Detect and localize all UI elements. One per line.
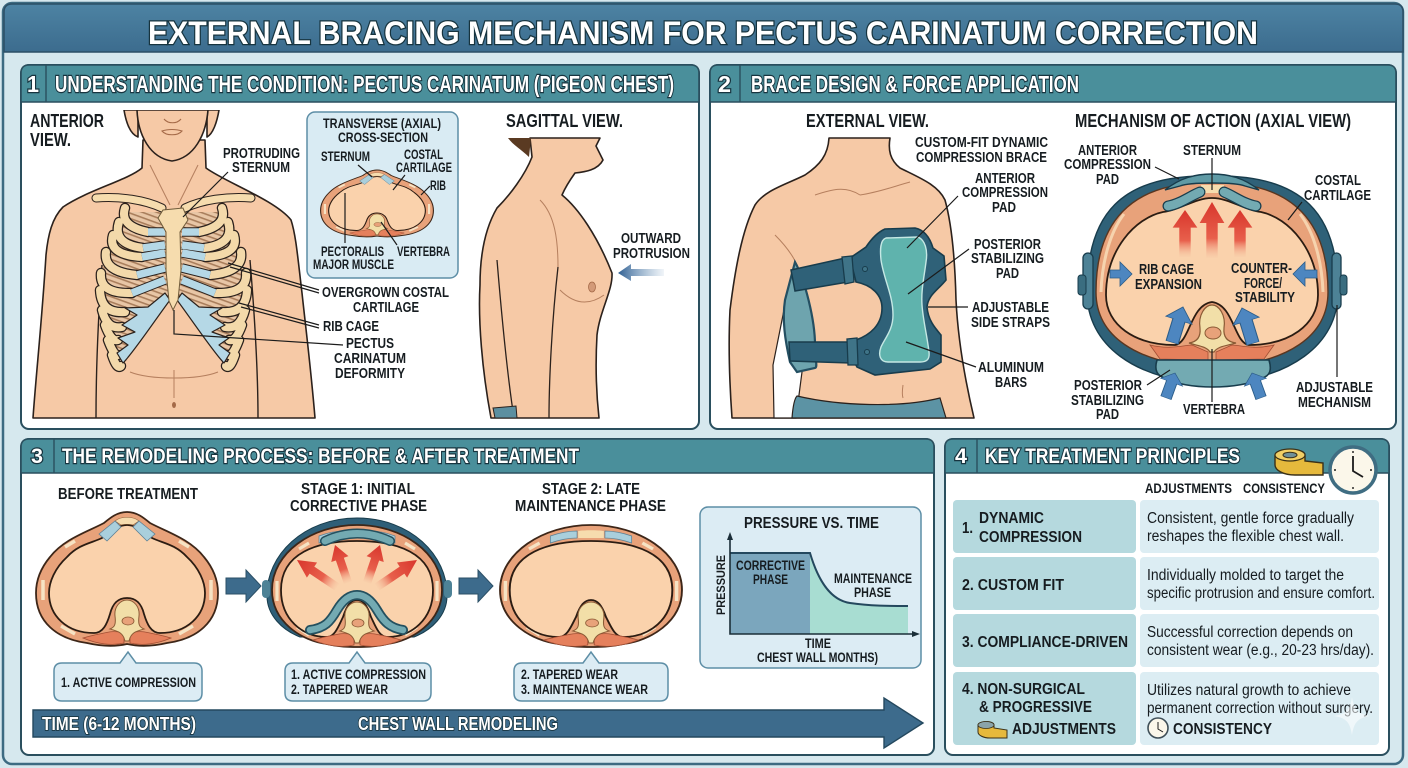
- principle 4: non-surgical and progressive: Utilizes natural growth to achieve: [1147, 682, 1351, 699]
- chart: pressure vs time: PRESSURE: [714, 555, 728, 615]
- label and arrow: outward protrusion: OUTWARD: [621, 231, 681, 247]
- principle 1: dynamic compression: Consistent, gentle force gradually: [1147, 510, 1354, 527]
- inset: transverse cross-section: VERTEBRA: [397, 244, 450, 259]
- label and arrow: outward protrusion: PROTRUSION: [613, 246, 690, 262]
- panel 4 heading: 4: [955, 445, 967, 468]
- chart: pressure vs time: [700, 507, 921, 668]
- stage 1: initial corrective phase: CORRECTIVE PHASE: [290, 498, 427, 515]
- chart: pressure vs time: CORRECTIVE: [736, 558, 805, 573]
- external view labels: POSTERIOR: [974, 237, 1041, 253]
- axial diagram labels: EXPANSION: [1135, 277, 1202, 293]
- label: pectus carinatum deformity: CARINATUM: [334, 351, 406, 367]
- panel 2 heading: BRACE DESIGN & FORCE APPLICATION: [751, 71, 1079, 97]
- axial diagram labels: ANTERIOR: [1078, 143, 1137, 159]
- principle 3: compliance-driven: [953, 614, 1379, 667]
- principle 4: non-surgical and progressive: [953, 672, 1379, 745]
- axial diagram labels: STABILIZING: [1071, 393, 1144, 409]
- thoracic cavity: [1106, 198, 1318, 345]
- label: overgrown costal cartilage: CARTILAGE: [353, 300, 419, 316]
- external view labels: ANTERIOR: [975, 171, 1035, 187]
- mechanism of action heading: MECHANISM OF ACTION (AXIAL VIEW): [1075, 111, 1351, 131]
- axial diagram labels: VERTEBRA: [1183, 402, 1245, 418]
- axial mechanism diagram: [1078, 174, 1347, 402]
- principle 1: dynamic compression: reshapes the flexible chest wall.: [1147, 528, 1344, 545]
- external view heading: EXTERNAL VIEW.: [806, 111, 929, 131]
- principle 3: compliance-driven: Successful correction depends on: [1147, 624, 1353, 641]
- stage: before treatment: [36, 486, 218, 701]
- posterior pad: [1156, 360, 1270, 387]
- stage 1: initial corrective phase: STAGE 1: INITIAL: [301, 481, 415, 498]
- arrow: stage 1 to stage 2: [459, 570, 493, 602]
- brace frame: [849, 228, 946, 375]
- stage: before treatment: BEFORE TREATMENT: [58, 486, 198, 503]
- external view labels: BARS: [995, 375, 1027, 391]
- panel 3 heading: [21, 439, 934, 473]
- brace green pad: [880, 237, 929, 362]
- anterior view heading: VIEW.: [30, 130, 71, 150]
- spine: [1150, 345, 1274, 360]
- panel 2: brace design: [710, 65, 1396, 429]
- arrow: before to stage 1: [226, 570, 261, 602]
- external view labels: SIDE STRAPS: [971, 315, 1050, 331]
- panel 2 heading: [710, 65, 1396, 102]
- axial diagram labels: POSTERIOR: [1074, 378, 1142, 394]
- chart: pressure vs time: TIME: [805, 636, 831, 651]
- stage 2: late maintenance phase: MAINTENANCE PHASE: [515, 498, 666, 515]
- panel 2 heading: 2: [718, 71, 731, 97]
- principle 2: custom fit: Individually molded to target the: [1147, 567, 1344, 584]
- icon: measuring tape: [1275, 449, 1323, 475]
- inset: transverse cross-section: CROSS-SECTION: [338, 130, 428, 145]
- timeline arrow: CHEST WALL REMODELING: [358, 714, 558, 734]
- label: protruding sternum: PROTRUDING: [223, 146, 300, 162]
- panel 1 heading: [21, 65, 699, 102]
- inset: transverse cross-section: RIB: [430, 178, 446, 193]
- external view labels: COMPRESSION BRACE: [916, 150, 1047, 166]
- panel 3 heading: THE REMODELING PROCESS: BEFORE & AFTER TREATMENT: [62, 445, 579, 468]
- principle 1: dynamic compression: 1.: [962, 520, 973, 537]
- panel 1 heading: UNDERSTANDING THE CONDITION: PECTUS CARINATUM (PIGEON CHEST): [55, 71, 674, 97]
- adjustable side mechanisms: [1083, 253, 1093, 309]
- icon: small tape: [978, 722, 1007, 738]
- axial diagram labels: [1064, 143, 1373, 423]
- label: pectus carinatum deformity: DEFORMITY: [335, 366, 405, 382]
- inset: transverse cross-section: CARTILAGE: [396, 160, 452, 175]
- axial diagram labels: STERNUM: [1183, 143, 1241, 159]
- principle 4: non-surgical and progressive: CONSISTENCY: [1173, 721, 1273, 738]
- panel 4 heading: [945, 439, 1389, 473]
- principle 2: custom fit: [953, 557, 1379, 610]
- title bar: [4, 4, 1403, 52]
- axial diagram labels: COSTAL: [1315, 173, 1361, 189]
- label: overgrown costal cartilage: OVERGROWN COSTAL: [322, 285, 449, 301]
- inset: transverse cross-section: PECTORALIS: [321, 244, 384, 259]
- principle 1: dynamic compression: [953, 500, 1379, 553]
- principle 3: compliance-driven: consistent wear (e.g., 20-23 hrs/day).: [1147, 642, 1374, 659]
- title bar: EXTERNAL BRACING MECHANISM FOR PECTUS CARINATUM CORRECTION: [148, 15, 1258, 51]
- axial diagram labels: COMPRESSION: [1064, 157, 1151, 173]
- inset: transverse cross-section: COSTAL: [404, 147, 443, 162]
- axial diagram labels: FORCE/: [1244, 276, 1282, 292]
- sagittal torso figure: [479, 138, 612, 418]
- chart: pressure vs time: PHASE: [854, 585, 891, 600]
- anterior view heading: ANTERIOR: [30, 111, 104, 131]
- brace straps: [789, 258, 850, 363]
- principle 1: dynamic compression: DYNAMIC: [979, 510, 1044, 527]
- icon: clock: [1330, 447, 1376, 493]
- axial diagram labels: PAD: [1096, 407, 1119, 423]
- principle 2: custom fit: specific protrusion and ensure comfort.: [1147, 585, 1375, 602]
- stage 1: initial corrective phase: 1. ACTIVE COMPRESSION: [291, 667, 426, 682]
- external view labels: PAD: [992, 200, 1016, 216]
- chart: pressure vs time: MAINTENANCE: [834, 571, 912, 586]
- external view labels: ADJUSTABLE: [972, 300, 1049, 316]
- stage 2: late maintenance phase: 2. TAPERED WEAR: [521, 667, 618, 682]
- axial diagram labels: RIB CAGE: [1139, 262, 1194, 278]
- timeline arrow: [33, 698, 923, 748]
- axial diagram labels: COUNTER-: [1231, 261, 1292, 277]
- timeline arrow: TIME (6-12 MONTHS): [42, 714, 196, 734]
- axial diagram labels: MECHANISM: [1298, 395, 1371, 411]
- label: rib cage: RIB CAGE: [323, 319, 379, 335]
- column labels: [1145, 481, 1325, 496]
- stage 2: late maintenance phase: STAGE 2: LATE: [542, 481, 640, 498]
- icon: small clock: [1148, 718, 1168, 738]
- chart: pressure vs time: PHASE: [753, 572, 788, 587]
- principle 4: non-surgical and progressive: 4. NON-SURGICAL: [962, 681, 1085, 698]
- principle 2: custom fit: 2. CUSTOM FIT: [962, 577, 1064, 594]
- external view labels: COMPRESSION: [962, 185, 1048, 201]
- label: rib cage: [239, 303, 379, 335]
- principle 3: compliance-driven: 3. COMPLIANCE-DRIVEN: [962, 634, 1128, 651]
- principle 4: non-surgical and progressive: & PROGRESSIVE: [979, 699, 1092, 716]
- sagittal view heading: SAGITTAL VIEW.: [506, 111, 623, 131]
- red compression arrows: [1173, 210, 1197, 257]
- brace ring: [1087, 176, 1338, 384]
- column labels: CONSISTENCY: [1243, 481, 1325, 496]
- axial diagram labels: STABILITY: [1235, 290, 1295, 306]
- external torso figure with brace: [729, 138, 974, 418]
- panel 3: remodeling process: [21, 439, 934, 755]
- label: pectus carinatum deformity: PECTUS: [346, 336, 394, 352]
- inset: transverse cross-section: STERNUM: [321, 149, 370, 164]
- stage: before treatment: 1. ACTIVE COMPRESSION: [61, 675, 196, 690]
- inset: transverse cross-section: TRANSVERSE (AXIAL): [323, 116, 441, 131]
- blue counter-force arrows: [1110, 262, 1132, 286]
- label: protruding sternum: [183, 146, 300, 217]
- external view labels: CUSTOM-FIT DYNAMIC: [915, 135, 1048, 151]
- axial diagram labels: CARTILAGE: [1304, 188, 1371, 204]
- principle 4: non-surgical and progressive: permanent correction without surgery.: [1147, 700, 1373, 717]
- principle 1: dynamic compression: COMPRESSION: [979, 529, 1082, 546]
- chart: pressure vs time: PRESSURE VS. TIME: [744, 515, 879, 532]
- external view labels: [906, 135, 1050, 391]
- external view labels: PAD: [996, 266, 1019, 282]
- stage 1: initial corrective phase: 2. TAPERED WEAR: [291, 682, 388, 697]
- brace back pad: [784, 262, 816, 372]
- external view labels: STABILIZING: [971, 251, 1044, 267]
- principle 4: non-surgical and progressive: ADJUSTMENTS: [1012, 721, 1116, 738]
- panel 4 heading: KEY TREATMENT PRINCIPLES: [985, 445, 1240, 468]
- panel 4: key treatment principles: [945, 439, 1389, 755]
- external view labels: ALUMINUM: [978, 360, 1044, 376]
- label: protruding sternum: STERNUM: [232, 160, 290, 176]
- chart: pressure vs time: CHEST WALL MONTHS): [757, 650, 878, 665]
- stage 1: initial corrective phase: [262, 481, 452, 701]
- panel 1 heading: 1: [27, 71, 39, 97]
- anterior torso figure with rib cage: [33, 104, 315, 418]
- anterior view heading: [30, 111, 104, 150]
- inset: transverse cross-section: [307, 112, 458, 278]
- stage 2: late maintenance phase: [500, 481, 682, 701]
- stage 2: late maintenance phase: 3. MAINTENANCE WEAR: [521, 682, 648, 697]
- label: overgrown costal cartilage: [228, 263, 449, 316]
- label and arrow: outward protrusion: [613, 231, 690, 281]
- axial diagram labels: ADJUSTABLE: [1296, 380, 1373, 396]
- panel 1: understanding the condition: [21, 65, 699, 429]
- column labels: ADJUSTMENTS: [1145, 481, 1232, 496]
- panel 3 heading: 3: [31, 445, 43, 468]
- anterior pad: [1165, 174, 1259, 190]
- inset: transverse cross-section: MAJOR MUSCLE: [313, 257, 394, 272]
- axial diagram labels: PAD: [1096, 172, 1119, 188]
- label: pectus carinatum deformity: [174, 310, 406, 382]
